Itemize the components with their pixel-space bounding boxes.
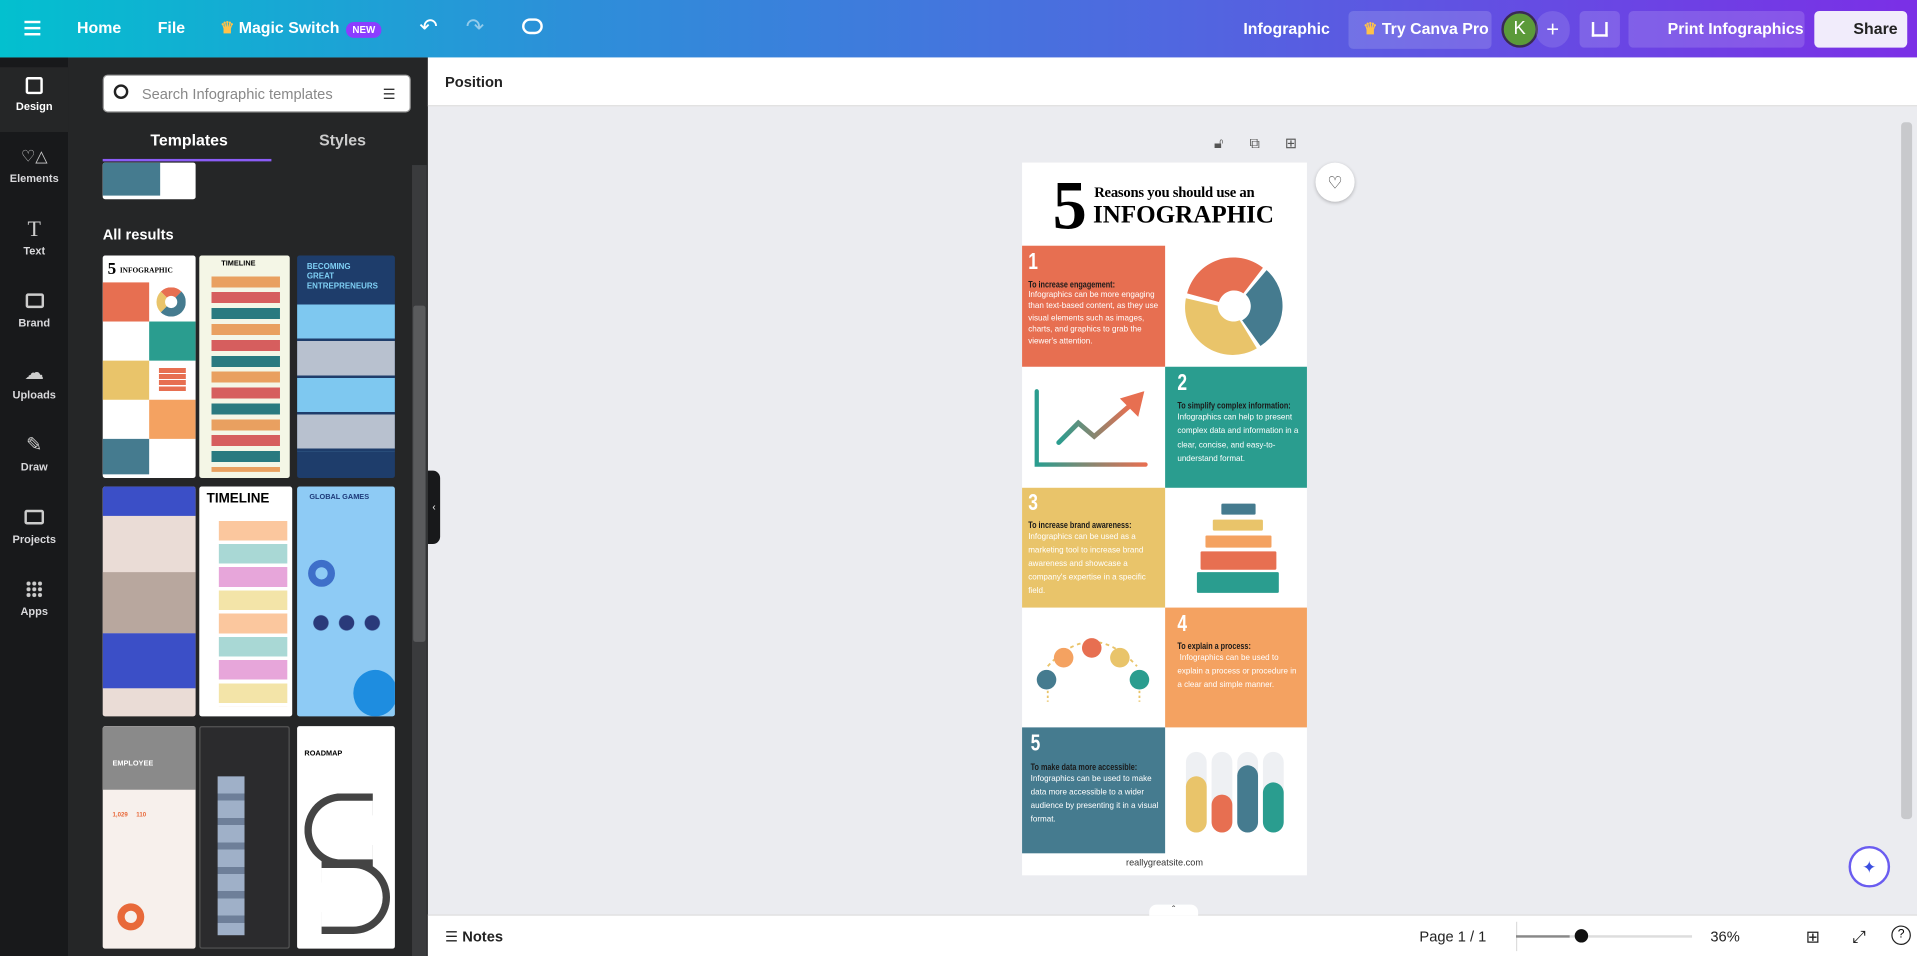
left sidebar: Elements	[10, 172, 59, 185]
bottom bar	[428, 914, 1917, 956]
share button: Share	[1853, 20, 1898, 38]
icon: donut	[1185, 258, 1283, 355]
page tab handle	[1149, 905, 1198, 916]
search box: ☰	[383, 86, 396, 103]
avatar	[1501, 11, 1538, 48]
try pro button: ♛ Try Canva Pro	[1363, 20, 1489, 38]
thumbnail: 5 reasons: 5	[108, 260, 116, 279]
thumbnail: entrepreneurs: ENTREPRENEURS	[307, 282, 378, 291]
title	[1053, 169, 1274, 245]
magic assistant button: ✦	[1862, 857, 1876, 877]
nav: projects	[24, 510, 44, 524]
panel: reason 2: To simplify complex information:	[1177, 400, 1291, 411]
title: Reasons you should use an	[1094, 183, 1254, 200]
add button	[1536, 11, 1570, 48]
panel: reason 1: To increase engagement:	[1028, 279, 1115, 290]
thumbnail: employee stats	[103, 726, 196, 949]
left sidebar: Uploads	[13, 389, 56, 401]
icon: cloud saved	[522, 18, 543, 34]
bottom bar: ⤢	[1852, 927, 1866, 946]
collapse handle: ‹	[432, 501, 436, 512]
panel: reason 3: To increase brand awareness:	[1028, 520, 1131, 531]
top bar	[0, 0, 1917, 57]
thumbnail: entrepreneurs: GREAT	[307, 273, 334, 281]
left sidebar: Projects	[13, 533, 56, 545]
thumbnail partial top	[103, 163, 196, 199]
bottom bar: Page 1 / 1	[1419, 928, 1486, 945]
panel: reason 1: Infographics can be more engaging than text-based content, as they use visual elements such as images, charts, and graphics to grab the viewer's attention.	[1028, 291, 1158, 346]
thumbnail: 5 reasons: INFOGRAPHIC	[120, 268, 173, 275]
nav: file: File	[158, 18, 185, 37]
stats button	[1580, 11, 1620, 48]
page toolbar icons: ⧉	[1249, 134, 1260, 152]
thumbnail: entrepreneurs: BECOMING	[307, 263, 351, 271]
all results heading: All results	[103, 226, 174, 243]
bottom bar: ?	[1898, 928, 1905, 941]
left sidebar: Design	[16, 100, 53, 112]
try pro button	[1349, 11, 1492, 49]
panel: reason 5: To make data more accessible:	[1031, 762, 1137, 773]
thumbnail: roadmap: ROADMAP	[304, 751, 342, 758]
panel: reason 5	[1022, 727, 1165, 853]
panel: reason 2: Infographics can help to present complex data and information in a clear, concise, and easy-to-understand format.	[1177, 413, 1298, 463]
comment button	[1315, 163, 1355, 202]
left sidebar	[0, 57, 68, 956]
thumbnail: timeline	[199, 256, 290, 478]
comment button: ♡	[1327, 172, 1343, 192]
bottom bar: ⊞	[1806, 927, 1820, 946]
icon: process dots	[1036, 638, 1150, 702]
doc title: Infographic	[1243, 20, 1330, 38]
nav: apps	[26, 581, 43, 598]
thumbnail: games report	[297, 487, 395, 716]
panel: reason 2: 2	[1177, 370, 1187, 396]
page toolbar icons: ⊞	[1285, 134, 1297, 152]
avatar: K	[1514, 18, 1526, 39]
nav: home: Home	[77, 18, 121, 37]
page toolbar icons: 🔓︎	[1214, 134, 1224, 152]
thumbnail: entrepreneurs	[297, 256, 395, 478]
template panel: Styles	[319, 131, 366, 149]
position bar: Position	[445, 73, 503, 90]
footer url: reallygreatsite.com	[1126, 857, 1203, 868]
left sidebar: Brand	[18, 317, 50, 329]
thumbnail: timeline: TIMELINE	[221, 260, 256, 268]
magic switch: ♛ Magic Switch NEW	[220, 18, 375, 37]
thumbnail: newsletter	[103, 487, 196, 716]
page tab handle: ˆ	[1172, 905, 1175, 916]
left sidebar: Apps	[20, 605, 48, 617]
thumbnail: timeline design	[199, 487, 292, 716]
add button: +	[1546, 17, 1559, 42]
panel: reason 1: 1	[1028, 249, 1038, 275]
panel: reason 5: Infographics can be used to make data more accessible to a wider audience by presenting it in a visual format.	[1031, 775, 1158, 824]
panel: reason 4: Infographics can be used to explain a process or procedure in a clear and simple manner.	[1177, 654, 1297, 689]
left sidebar: Draw	[21, 461, 48, 473]
collapse handle	[428, 471, 440, 544]
print button	[1628, 11, 1805, 48]
icon: line chart	[1034, 389, 1148, 467]
canvas scrollbar	[1901, 122, 1912, 819]
panel: reason 1	[1022, 246, 1165, 367]
thumbnail: timeline design: TIMELINE	[207, 491, 269, 506]
nav: brand	[26, 293, 44, 308]
bottom bar: ☰ Notes	[445, 928, 503, 945]
position bar	[428, 57, 1917, 106]
print button: Print Infographics	[1668, 20, 1804, 38]
panel: reason 4: 4	[1177, 611, 1187, 637]
panel: reason 3: 3	[1028, 490, 1038, 516]
panel: reason 3: Infographics can be used as a marketing tool to increase brand awareness and showcase a company's expertise in a specific field.	[1028, 533, 1146, 595]
search box	[103, 75, 411, 112]
tabs: Templates	[150, 131, 228, 149]
thumbnail: roadmap	[297, 726, 395, 949]
thumbnail: career tips	[199, 726, 290, 949]
icon: undo: ↶	[419, 15, 438, 39]
bottom bar: 36%	[1710, 928, 1740, 945]
panel: reason 4: To explain a process:	[1177, 641, 1251, 652]
thumbnail: employee stats: EMPLOYEE	[112, 760, 153, 768]
thumbnail: employee stats: 1,029 110	[112, 812, 146, 819]
title: 5	[1053, 169, 1087, 245]
magic assistant button	[1849, 846, 1890, 888]
panel scrollbar	[412, 165, 427, 956]
panel: reason 5: 5	[1031, 731, 1040, 757]
search box: Search Infographic templates	[142, 86, 333, 103]
nav: draw: ✎	[26, 435, 42, 456]
template panel	[68, 57, 428, 956]
thumbnail: 5 reasons	[103, 256, 196, 478]
nav: design active	[0, 67, 68, 132]
nav: text: T	[28, 216, 41, 241]
thumbnail: games report: GLOBAL GAMES	[309, 494, 369, 501]
icon: redo: ↷	[466, 15, 484, 39]
page toolbar icons	[1214, 134, 1297, 152]
icon: menu	[24, 21, 40, 35]
icon: bar chart	[1186, 752, 1284, 832]
nav: elements: ♡△	[21, 147, 47, 165]
panel: reason 3	[1022, 488, 1165, 608]
infographic card	[1022, 163, 1307, 875]
nav: uploads: ☁	[24, 363, 44, 384]
panel: reason 4	[1165, 608, 1307, 727]
share button	[1814, 11, 1907, 48]
left sidebar: Text	[23, 245, 45, 257]
icon: pyramid	[1196, 504, 1279, 593]
title: INFOGRAPHIC	[1093, 202, 1274, 229]
panel: reason 2	[1165, 367, 1307, 488]
